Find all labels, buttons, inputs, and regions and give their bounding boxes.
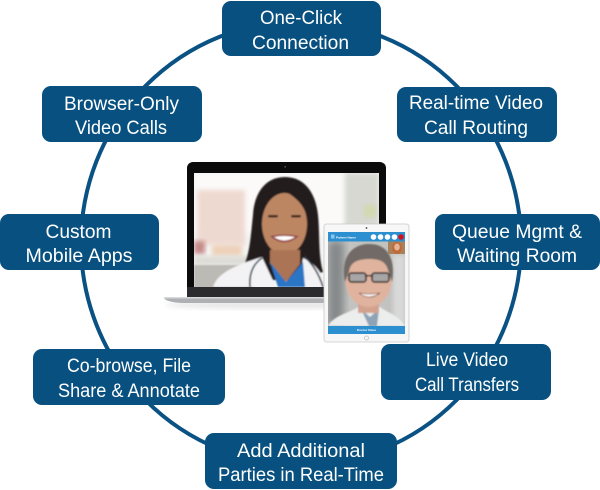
feature: One-Click Connection: One-Click <box>260 8 342 29</box>
feature: Browser-Only Video Calls: Browser-Only <box>64 94 179 115</box>
feature: Custom Mobile Apps: Custom <box>46 222 112 243</box>
tablet: Patient Name <box>336 236 356 240</box>
tablet: Doctor Dave <box>357 328 376 332</box>
feature: Queue Mgmt and Waiting Room: Waiting Room <box>457 246 577 267</box>
feature: Queue Mgmt and Waiting Room: Queue Mgmt & <box>452 222 582 243</box>
feature: Co-browse, File Share and Annotate <box>33 349 225 405</box>
ring connecting features <box>81 21 521 465</box>
feature: Custom Mobile Apps: Mobile Apps <box>26 246 132 267</box>
feature: Live Video Call Transfers: Call Transfers <box>415 375 519 396</box>
laptop <box>164 162 392 309</box>
feature: Co-browse, File Share and Annotate: Share & Annotate <box>58 381 200 402</box>
feature: Browser-Only Video Calls: Video Calls <box>75 118 167 139</box>
feature: One-Click Connection: Connection <box>252 33 349 54</box>
feature: Live Video Call Transfers <box>381 344 551 400</box>
feature: One-Click Connection <box>222 1 381 56</box>
feature: Co-browse, File Share and Annotate: Co-browse, File <box>67 356 191 377</box>
feature: Add Additional Parties in Real-Time: Parties in Real-Time <box>218 465 384 486</box>
feature: Real-time Video Call Routing <box>397 87 557 142</box>
feature: Custom Mobile Apps <box>0 214 159 270</box>
device illustration: laptop and tablet <box>164 162 409 342</box>
feature: Add Additional Parties in Real-Time <box>205 433 397 489</box>
feature: Live Video Call Transfers: Live Video <box>426 350 508 371</box>
tablet <box>324 224 409 342</box>
feature: Add Additional Parties in Real-Time: Add Additional <box>237 441 365 462</box>
feature: Queue Mgmt and Waiting Room <box>435 214 600 270</box>
feature: Browser-Only Video Calls <box>42 86 202 142</box>
feature: Real-time Video Call Routing: Real-time Video <box>409 93 543 114</box>
feature: Real-time Video Call Routing: Call Routing <box>424 118 528 139</box>
